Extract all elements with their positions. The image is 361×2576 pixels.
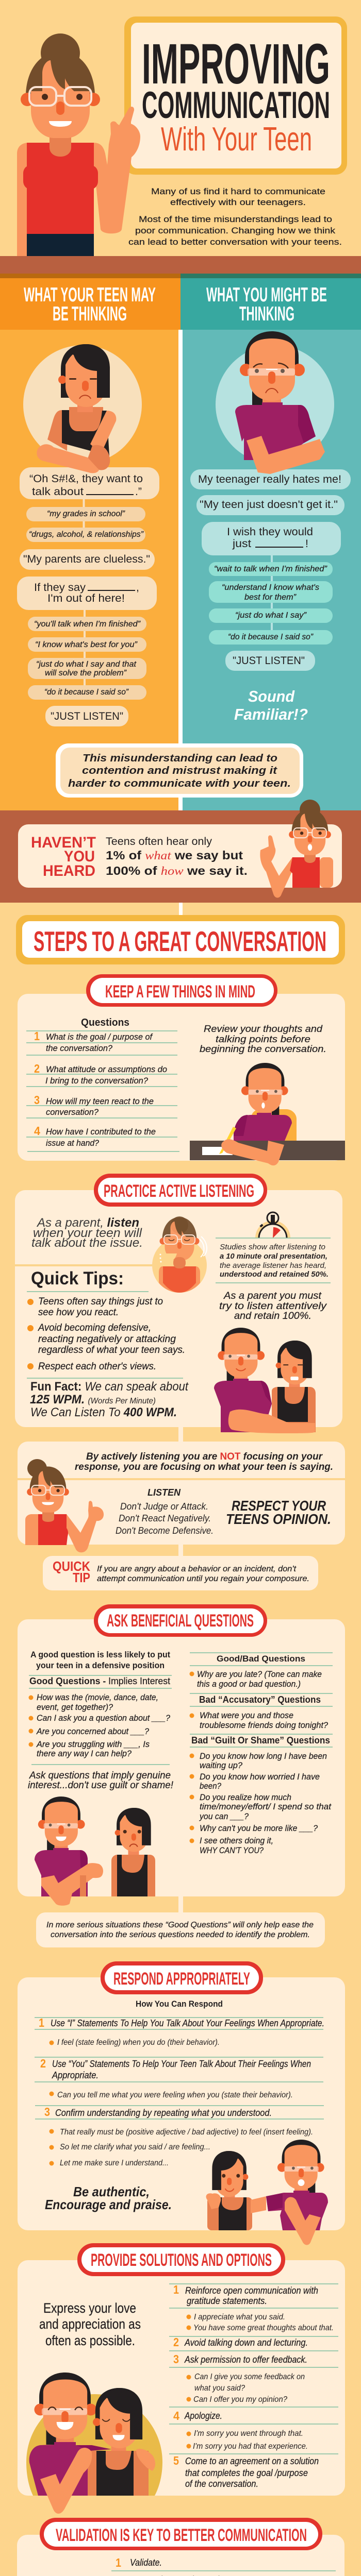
heading pill bbox=[101, 1961, 263, 1994]
heading pill: ASK BENEFICIAL QUESTIONS bbox=[107, 1611, 254, 1631]
heading: what you might be thinking: THINKING bbox=[239, 303, 294, 325]
intro text: poor communication. Changing how we think bbox=[135, 226, 336, 235]
callout: quick tip: attempt communication until you regain your composure. bbox=[97, 1574, 309, 1583]
stat text: 1% of what we say but bbox=[106, 849, 243, 862]
review text bbox=[200, 1024, 326, 1054]
quick tips bbox=[27, 1268, 185, 1378]
good questions column: your teen in a defensive position bbox=[36, 1660, 165, 1670]
numbered solutions: Ask permission to offer feedback. bbox=[184, 2354, 307, 2365]
bad questions column: What were you and those bbox=[200, 1711, 293, 1720]
good questions column: Good Questions - Implies Interest bbox=[29, 1676, 170, 1686]
review text: beginning the conversation. bbox=[200, 1044, 326, 1054]
title card bbox=[124, 16, 347, 175]
speech bubbles: "My teen just doesn't get it." bbox=[200, 499, 338, 511]
speech bubbles: “do it because I said so” bbox=[44, 688, 129, 697]
heading: what your teen may be thinking bbox=[24, 284, 156, 325]
panel: practice active listening bbox=[15, 1174, 342, 1433]
bad questions column: Why are you late? (Tone can make bbox=[197, 1670, 322, 1679]
panel: respond appropriately bbox=[18, 1961, 345, 2245]
connector bbox=[179, 903, 183, 915]
speech bubbles bbox=[190, 469, 351, 671]
listen list: Don't Judge or Attack. bbox=[120, 1501, 208, 1512]
intro text: can lead to better conversation with your teens. bbox=[128, 237, 342, 247]
bad questions column: waiting up? bbox=[200, 1761, 243, 1770]
numbered solutions: Can I offer you my opinion? bbox=[193, 2395, 287, 2404]
good questions column bbox=[28, 1650, 174, 1791]
numbered solutions: 3 bbox=[173, 2352, 179, 2366]
speech bubbles bbox=[17, 467, 159, 726]
speech bubbles: just bbox=[232, 538, 251, 550]
response steps: I feel (state feeling) when you do (their behavior). bbox=[57, 2038, 220, 2047]
speech bubbles: “you'll talk when I'm finished” bbox=[34, 620, 141, 629]
actively listening text: response, you are focusing on what your teen is saying. bbox=[75, 1462, 333, 1472]
intro: listen bbox=[31, 1216, 143, 1250]
callout: misunderstanding: contention and mistrust making it bbox=[82, 765, 278, 776]
numbered solutions: 4 bbox=[173, 2409, 179, 2422]
response steps: Can you tell me what you were feeling when you (state their behavior). bbox=[57, 2091, 293, 2099]
response steps: Appropriate. bbox=[52, 2070, 99, 2080]
bad questions column bbox=[190, 1653, 333, 1855]
speech bubbles: "JUST LISTEN" bbox=[233, 655, 305, 667]
questions list bbox=[26, 1017, 179, 1151]
bad questions column: troublesome friends doing tonight? bbox=[200, 1721, 329, 1730]
response steps: 2 bbox=[40, 2057, 46, 2070]
characters: parent and teen talking bbox=[35, 1797, 155, 1906]
quick tips: Quick Tips: bbox=[31, 1268, 124, 1289]
numbered solutions: I'm sorry you had that experience. bbox=[193, 2442, 308, 2451]
character: mother thumbs up bbox=[25, 1459, 104, 1552]
numbered solutions: Avoid talking down and lecturing. bbox=[184, 2337, 308, 2348]
numbered solutions: 5 bbox=[173, 2454, 179, 2467]
speech bubbles: If they say bbox=[34, 582, 86, 594]
panel: parent thinking bbox=[178, 278, 361, 810]
heading pill bbox=[77, 2243, 285, 2276]
speech bubbles: I wish they would bbox=[227, 526, 313, 538]
callout: serious situations bbox=[36, 1912, 325, 1947]
numbered solutions: Can I give you some feedback on bbox=[194, 2372, 305, 2381]
intro text: Many of us find it hard to communicate bbox=[151, 187, 325, 196]
heading pill: KEEP A FEW THINGS IN MIND bbox=[105, 982, 255, 1002]
bad questions column: Do you know how long I have been bbox=[200, 1752, 327, 1761]
quick tips: see how you react. bbox=[38, 1307, 119, 1318]
callout: quick tip: TIP bbox=[73, 1570, 90, 1585]
numbered solutions: 1 bbox=[173, 2283, 179, 2296]
stat text bbox=[106, 836, 248, 877]
speech bubbles: “wait to talk when I'm finished” bbox=[214, 565, 327, 573]
speech bubbles: “just do what I say and that bbox=[36, 660, 137, 669]
panel: ask beneficial questions bbox=[18, 1604, 345, 1906]
good questions column: Ask questions that imply genuine bbox=[29, 1770, 171, 1781]
speech bubbles: “I know what's best for you” bbox=[35, 640, 138, 649]
callout: misunderstanding bbox=[56, 743, 303, 798]
intro: listen: talk about the issue. bbox=[31, 1236, 143, 1250]
study text bbox=[220, 1243, 329, 1279]
bad questions column: time/money/effort/ I spend so that bbox=[200, 1802, 332, 1811]
heading pill: RESPOND APPROPRIATELY bbox=[113, 1969, 250, 1989]
questions list: issue at hand? bbox=[46, 1138, 99, 1148]
speech bubbles: My teenager really hates me! bbox=[198, 473, 341, 485]
heading: what you might be thinking bbox=[206, 284, 327, 325]
speech bubbles: “do it because I said so” bbox=[228, 633, 314, 641]
heading pill bbox=[40, 2518, 322, 2550]
connector bbox=[178, 1427, 183, 1442]
speech bubbles: will solve the problem” bbox=[45, 669, 127, 677]
numbered solutions: Reinforce open communication with bbox=[185, 2285, 318, 2296]
character: teen arms crossed bbox=[37, 344, 116, 473]
be authentic text bbox=[45, 2184, 172, 2212]
panel: provide solutions and options bbox=[18, 2243, 345, 2514]
speech bubbles: “drugs, alcohol, & relationships” bbox=[29, 530, 144, 539]
be authentic text: Be authentic, bbox=[73, 2184, 150, 2199]
express your love text bbox=[39, 2300, 141, 2348]
good questions column: event, get together)? bbox=[37, 1703, 113, 1712]
questions list: How will my teen react to the bbox=[46, 1096, 154, 1106]
heading: steps to a great conversation bbox=[16, 915, 345, 964]
express your love text: and appreciation as bbox=[39, 2316, 141, 2332]
connector bbox=[178, 1545, 183, 1556]
good questions column: interest...don't use guilt or shame! bbox=[28, 1780, 174, 1791]
numbered solutions: 2 bbox=[173, 2335, 179, 2349]
speech bubbles: “Oh S#!&, they want to bbox=[29, 473, 143, 485]
callout: quick tip bbox=[43, 1556, 318, 1590]
good questions column: there any way I can help? bbox=[37, 1749, 132, 1758]
speech bubbles: "My parents are clueless." bbox=[23, 553, 150, 565]
express your love text: often as possible. bbox=[45, 2333, 135, 2348]
questions list: 4 bbox=[34, 1124, 40, 1138]
callout: quick tip: QUICK bbox=[53, 1558, 90, 1574]
respect text: TEENS OPINION. bbox=[226, 1511, 331, 1527]
connector bbox=[178, 1896, 183, 1912]
callout: serious situations: In more serious situations these “Good Questions” will only help ease the bbox=[46, 1921, 314, 1929]
callout: misunderstanding: harder to communicate with your teen. bbox=[68, 778, 291, 789]
speech bubbles: , bbox=[136, 582, 139, 594]
bad questions column: Bad “Guilt Or Shame” Questions bbox=[191, 1735, 330, 1745]
questions list: conversation? bbox=[46, 1107, 99, 1117]
bad questions column: Why can't you be more like ___? bbox=[200, 1824, 318, 1833]
quick tips: Avoid becoming defensive, bbox=[38, 1323, 151, 1333]
questions list: I bring to the conversation? bbox=[45, 1076, 149, 1086]
listen list bbox=[116, 1487, 214, 1536]
panel: haven't you heard bbox=[0, 800, 361, 903]
response steps: Use “You” Statements To Help Your Teen Talk About Their Feelings When bbox=[52, 2059, 311, 2069]
numbered solutions: You have some great thoughts about that. bbox=[193, 2324, 334, 2332]
validation steps: Validate. bbox=[130, 2557, 162, 2568]
numbered solutions: that completes the goal /purpose bbox=[185, 2468, 308, 2478]
numbered solutions: gratitude statements. bbox=[187, 2296, 267, 2306]
respect text bbox=[226, 1498, 331, 1527]
response steps: 1 bbox=[39, 2016, 44, 2029]
questions list: How have I contributed to the bbox=[46, 1127, 156, 1137]
heading pill bbox=[94, 1174, 267, 1207]
bad questions column: Do you realize how much bbox=[200, 1793, 291, 1802]
heading: haven't you heard: HAVEN’T bbox=[31, 834, 96, 851]
speech bubbles: best for them” bbox=[244, 593, 297, 602]
intro: listen: As a parent, listen bbox=[36, 1216, 139, 1230]
response steps: That really must be (positive adjective / bad adjective) to feel (insert feeling). bbox=[60, 2128, 313, 2137]
quick tips: reacting negatively or attacking bbox=[38, 1334, 176, 1345]
characters: happy parent and teen bbox=[26, 2372, 162, 2514]
text: sound familiar: Sound bbox=[248, 687, 295, 705]
validation steps: 1 bbox=[116, 2556, 121, 2569]
respect text: RESPECT YOUR bbox=[232, 1498, 326, 1514]
heading: haven't you heard: YOU bbox=[64, 848, 95, 865]
intro text: Most of the time misunderstandings lead to bbox=[139, 214, 332, 224]
intro: listen: when your teen will bbox=[33, 1226, 142, 1240]
fun fact: Fun Fact: We can speak about bbox=[30, 1380, 189, 1394]
text: sound familiar bbox=[234, 687, 308, 723]
fun fact: 125 WPM. (Words Per Minute) bbox=[30, 1393, 156, 1406]
characters: parent arm around teen bbox=[206, 2140, 328, 2245]
bad questions column: Good/Bad Questions bbox=[217, 1654, 305, 1664]
quick tips: Teens often say things just to bbox=[38, 1296, 163, 1307]
bad questions column: this a good or bad question.) bbox=[197, 1680, 301, 1689]
character: mother with finger up bbox=[260, 800, 333, 897]
express your love text: Express your love bbox=[43, 2300, 136, 2316]
actively listening text bbox=[75, 1451, 333, 1472]
study text: the average listener has heard, bbox=[220, 1261, 326, 1270]
character: parent writing at desk bbox=[190, 1063, 345, 1165]
actively listening text: By actively listening you are NOT focusing on your bbox=[86, 1451, 323, 1462]
questions list: 1 bbox=[34, 1029, 40, 1043]
questions list: What is the goal / purpose of bbox=[46, 1032, 153, 1042]
study text: a 10 minute oral presentation, bbox=[220, 1252, 327, 1261]
response steps: So let me clarify what you said / are feeling... bbox=[60, 2143, 210, 2151]
good questions column: Are you concerned about ___? bbox=[36, 1727, 150, 1736]
callout: misunderstanding: This misunderstanding can lead to bbox=[83, 753, 277, 764]
panel: teen thinking bbox=[0, 278, 180, 810]
review text: talking points before bbox=[216, 1034, 310, 1044]
fun fact: We Can Listen To 400 WPM. bbox=[30, 1405, 177, 1419]
listen list: Don't React Negatively. bbox=[119, 1513, 211, 1523]
response steps bbox=[35, 1999, 324, 2167]
retain text bbox=[219, 1291, 327, 1321]
study text: Studies show after listening to bbox=[220, 1243, 325, 1251]
numbered solutions: I'm sorry you went through that. bbox=[194, 2429, 303, 2438]
hero section bbox=[17, 16, 347, 256]
speech bubbles: "JUST LISTEN" bbox=[51, 710, 123, 722]
questions list: 3 bbox=[34, 1093, 40, 1107]
numbered solutions bbox=[169, 2283, 338, 2489]
character: worried parent bbox=[235, 331, 325, 474]
numbered solutions: Come to an agreement on a solution bbox=[185, 2456, 319, 2466]
bad questions column: I see others doing it, bbox=[200, 1836, 273, 1845]
response steps: 3 bbox=[44, 2105, 50, 2119]
panel: validation is key bbox=[17, 2518, 344, 2576]
circle backdrop bbox=[216, 345, 334, 464]
questions list: the conversation? bbox=[46, 1043, 113, 1053]
bad questions column: Bad “Accusatory” Questions bbox=[199, 1694, 321, 1705]
bad questions column: Do you know how worried I have bbox=[200, 1772, 320, 1782]
heading pill: PRACTICE ACTIVE LISTENING bbox=[104, 1181, 254, 1201]
speech bubbles: “just do what I say” bbox=[235, 611, 307, 620]
bad questions column: you can ___? bbox=[199, 1812, 249, 1821]
retain text: try to listen attentively bbox=[219, 1301, 327, 1312]
panel: keep a few things in mind bbox=[18, 974, 345, 1165]
panel: respect your teen's opinion bbox=[18, 1442, 345, 1552]
good questions column: A good question is less likely to put bbox=[30, 1650, 170, 1659]
callout: quick tip: If you are angry about a behavior or an incident, don't bbox=[97, 1565, 297, 1573]
numbered solutions: I appreciate what you said. bbox=[194, 2313, 285, 2321]
response steps: Confirm understanding by repeating what you understood. bbox=[55, 2108, 272, 2118]
character: pointing mother bbox=[17, 33, 140, 256]
heading: what your teen may be thinking: BE THINKING bbox=[53, 303, 127, 325]
review text: Review your thoughts and bbox=[204, 1024, 323, 1034]
response steps: How You Can Respond bbox=[136, 1999, 223, 2009]
intro text bbox=[128, 187, 342, 247]
callout: serious situations: conversation into the serious questions needed to identify the problem. bbox=[51, 1930, 310, 1939]
quick tips: regardless of what your teen says. bbox=[38, 1345, 185, 1355]
heading pill bbox=[86, 974, 277, 1007]
good questions column: How was the (movie, dance, date, bbox=[37, 1693, 158, 1702]
fun fact bbox=[30, 1380, 189, 1419]
listen list: LISTEN bbox=[147, 1487, 181, 1498]
bad questions column: WHY CAN'T YOU? bbox=[200, 1846, 264, 1855]
speech bubbles: I'm out of here! bbox=[47, 592, 125, 604]
response steps: Use “I” Statements To Help You Talk About Your Feelings When Appropriate. bbox=[51, 2018, 324, 2028]
character: mother listening bbox=[152, 1216, 207, 1293]
quick tips: Respect each other's views. bbox=[38, 1361, 156, 1372]
speech bubbles: .” bbox=[135, 486, 142, 498]
be authentic text: Encourage and praise. bbox=[45, 2197, 172, 2212]
numbered solutions: what you said? bbox=[194, 2384, 245, 2393]
listen list: Don't Become Defensive. bbox=[116, 1526, 214, 1536]
heading: haven't you heard bbox=[31, 834, 96, 879]
intro text: effectively with our teenagers. bbox=[170, 197, 306, 207]
speech bubbles: “my grades in school” bbox=[47, 510, 125, 518]
speech bubbles: ! bbox=[305, 538, 308, 550]
icon: stopwatch bbox=[255, 1212, 290, 1238]
numbered solutions: Apologize. bbox=[184, 2411, 222, 2421]
text: sound familiar: Familiar!? bbox=[234, 705, 308, 723]
numbered solutions: of the conversation. bbox=[185, 2479, 258, 2489]
characters: parent and teen bbox=[214, 1328, 316, 1433]
good questions column: Can I ask you a question about ___? bbox=[37, 1714, 171, 1723]
divider band bbox=[0, 256, 361, 278]
study text: understood and retained 50%. bbox=[220, 1270, 329, 1279]
heading: what your teen may be thinking: WHAT YOUR TEEN MAY bbox=[24, 284, 156, 306]
validation steps bbox=[111, 2556, 336, 2576]
stat text: 100% of how we say it. bbox=[106, 864, 248, 877]
stat text: Teens often hear only bbox=[106, 836, 212, 848]
questions list: Questions bbox=[81, 1017, 129, 1028]
questions list: 2 bbox=[34, 1062, 40, 1075]
speech bubbles: “understand I know what's bbox=[222, 583, 319, 592]
circle backdrop bbox=[23, 345, 142, 464]
heading pill bbox=[94, 1604, 267, 1637]
speech bubbles: talk about bbox=[32, 486, 84, 498]
questions list: What attitude or assumptions do bbox=[46, 1064, 167, 1074]
retain text: and retain 100%. bbox=[234, 1311, 311, 1321]
good questions column: Are you struggling with ___, Is bbox=[36, 1740, 150, 1749]
bad questions column: been? bbox=[200, 1782, 222, 1791]
heading: haven't you heard: HEARD bbox=[43, 862, 95, 879]
response steps: Let me make sure I understand... bbox=[60, 2159, 169, 2167]
retain text: As a parent you must bbox=[223, 1291, 322, 1301]
